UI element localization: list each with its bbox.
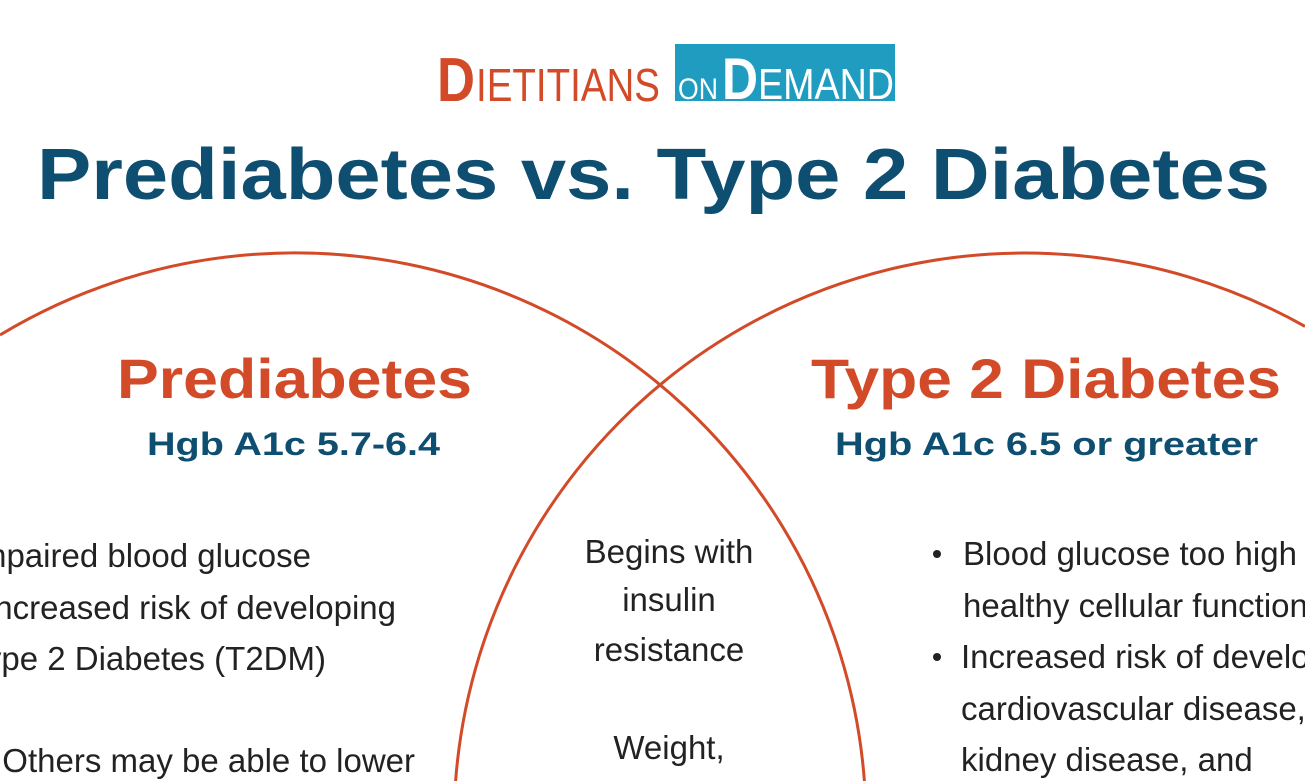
logo [440,44,895,102]
logo: dietitians [440,58,658,102]
venn circles [0,253,1305,781]
logo: dietitians: D [437,46,475,115]
text: prediabetes list [0,537,415,779]
text: shared center: Weight, [613,729,725,766]
logo: on demand box [675,44,895,101]
panel: type 2 heading: Type 2 Diabetes [811,347,1281,410]
text: type 2 list: healthy cellular function [963,587,1305,624]
logo: on demand box: D [722,47,758,112]
title: Prediabetes vs. Type 2 Diabetes [37,135,1270,215]
text: type 2 list: kidney disease, and [961,741,1253,778]
text: shared center [585,533,753,766]
logo: on demand box: EMAND [758,60,894,109]
text: shared center: Begins with [585,533,753,570]
text: type 2 list [933,535,1305,778]
panel: prediabetes heading: Hgb A1c 5.7-6.4 [147,426,440,462]
text: shared center: insulin [622,581,716,618]
panel: prediabetes heading: Prediabetes [117,347,472,410]
panel: type 2 heading [812,358,1278,462]
panel: type 2 heading: Hgb A1c 6.5 or greater [835,426,1258,462]
logo: dietitians: IETITIANS [476,59,660,111]
panel: prediabetes heading [121,358,470,462]
logo: on demand box: ON [678,73,718,106]
text: shared center: resistance [594,631,744,668]
text: type 2 list: cardiovascular disease, [961,690,1305,727]
